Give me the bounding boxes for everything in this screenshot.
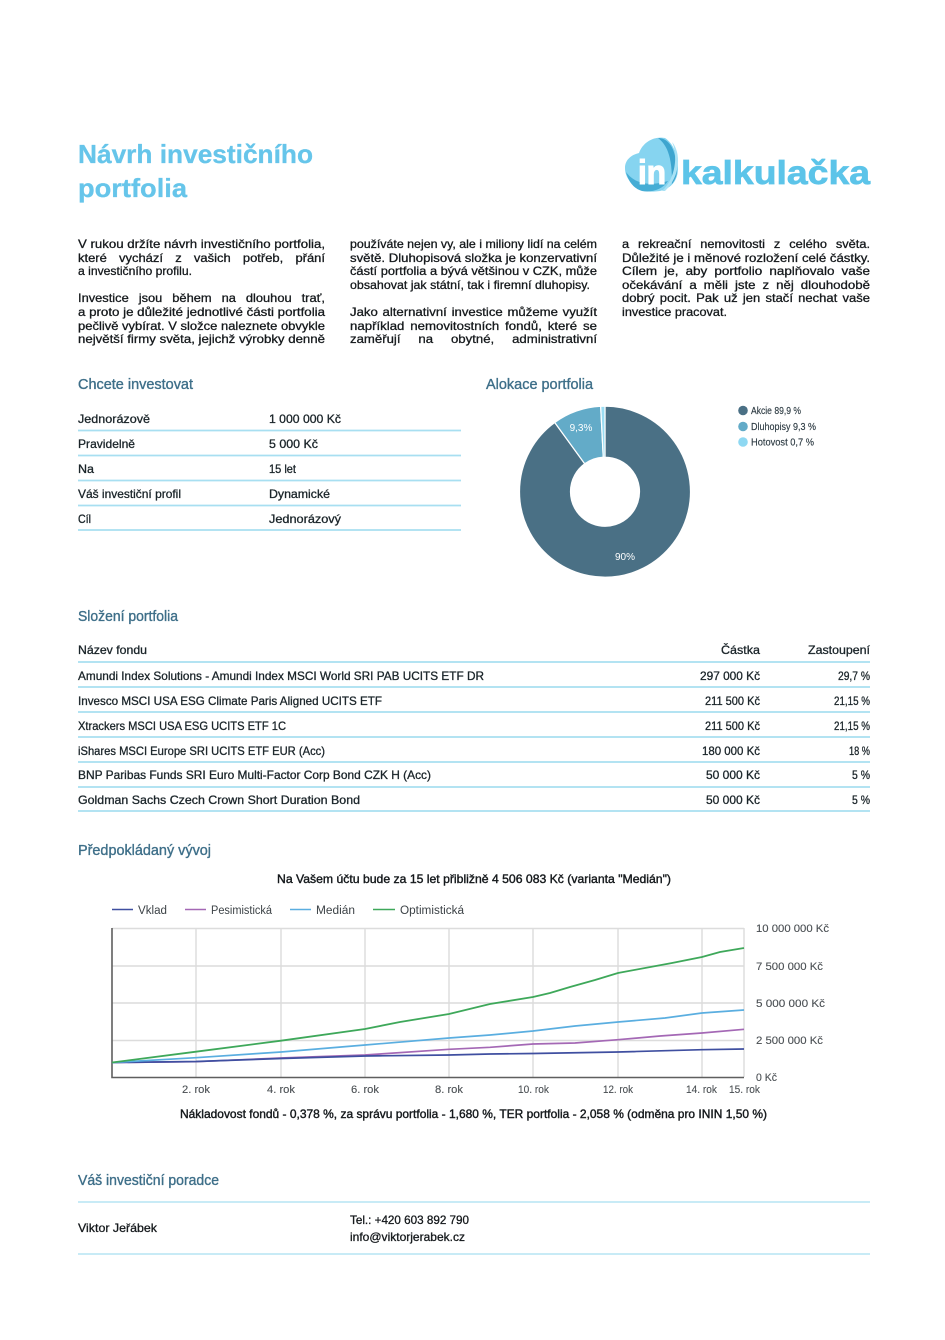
y axis labels: 5 000 000 Kč	[756, 998, 826, 1010]
logo: inkalkulačka: kalkulačka	[681, 154, 871, 191]
text block: column 3: Důležité je i měnové rozložení celé částky.	[622, 251, 870, 265]
table: funds: 21,15 %	[834, 694, 870, 708]
text block: column 1	[78, 237, 326, 346]
table: funds: 50 000 Kč	[706, 793, 760, 807]
table: funds: Invesco MSCI USA ESG Climate Paris Aligned UCITS ETF	[78, 694, 382, 708]
table: investment parameters: Dynamické	[269, 487, 330, 501]
legend: allocation: Dluhopisy 9,3 %	[751, 421, 816, 433]
panel: chcete investovat	[78, 377, 461, 530]
table: funds: 211 500 Kč	[705, 694, 760, 708]
text block: column 2: například nemovitostních fondů, které se	[350, 319, 597, 333]
title: Návrh investičního	[78, 139, 313, 169]
fees note: Nákladovost fondů - 0,378 %, za správu portfolia - 1,680 %, TER portfolia - 2,058 % (odměna pro ININ 1,50 %)	[180, 1107, 767, 1121]
text block: column 2: používáte nejen vy, ale i miliony lidí na celém	[350, 237, 597, 251]
x axis labels: 4. rok	[267, 1084, 296, 1096]
table: funds: 18 %	[849, 744, 870, 758]
donut chart: 90%	[615, 552, 635, 563]
heading: alokace portfolia: Alokace portfolia	[486, 377, 594, 393]
panel: alokace portfolia	[486, 377, 816, 577]
table: investment parameters: Jednorázový	[269, 512, 341, 526]
advisor contact: info@viktorjerabek.cz	[350, 1230, 465, 1244]
x axis labels: 12. rok	[603, 1084, 633, 1096]
text block: column 3: očekávání a měli jste z něj dlouhodobě	[622, 278, 870, 292]
heading: předpokládaný vývoj: Předpokládaný vývoj	[78, 843, 211, 859]
chart legend	[112, 905, 465, 917]
table: funds: 21,15 %	[834, 719, 870, 733]
heading: složení portfolia: Složení portfolia	[78, 609, 179, 625]
table: funds: 50 000 Kč	[706, 768, 760, 782]
table: investment parameters: Na	[78, 462, 94, 476]
advisor contact	[350, 1213, 469, 1244]
text block: column 1: a proto je důležité jednotlivé části portfolia	[78, 305, 325, 319]
x axis labels: 2. rok	[182, 1084, 211, 1096]
table: investment parameters	[78, 412, 461, 530]
advisor contact: Tel.: +420 603 892 790	[350, 1213, 469, 1227]
table: investment parameters: 1 000 000 Kč	[269, 412, 341, 426]
legend: allocation: Akcie 89,9 %	[751, 405, 801, 417]
panel: předpokládaný vývoj	[78, 843, 830, 1121]
y axis labels: 7 500 000 Kč	[756, 961, 824, 973]
y axis labels: 10 000 000 Kč	[756, 923, 830, 935]
heading: chcete investovat: Chcete investovat	[78, 377, 193, 393]
title: portfolia	[78, 173, 188, 203]
text block: column 1: Investice jsou během na dlouhou trať,	[78, 291, 325, 305]
text block: column 1: a investičního profilu.	[78, 264, 192, 278]
x axis labels: 8. rok	[435, 1084, 464, 1096]
table: funds: iShares MSCI Europe SRI UCITS ETF EUR (Acc)	[78, 744, 325, 758]
text block: column 2: Jako alternativní investice můžeme využít	[350, 305, 598, 319]
text block: column 2: obsahovat jak státní, tak i firemní dluhopisy.	[350, 278, 590, 292]
table: funds: Název fondu	[78, 643, 147, 657]
text block: column 1: pečlivě vybírat. V složce naleznete obvykle	[78, 319, 325, 333]
y axis labels: 2 500 000 Kč	[756, 1035, 824, 1047]
table: investment parameters: Cíl	[78, 512, 91, 526]
x axis labels: 10. rok	[518, 1084, 549, 1096]
text block: column 2	[350, 237, 598, 346]
text block: column 2: zaměřují na obytné, administrativní	[350, 332, 598, 346]
x axis labels	[182, 1084, 760, 1096]
panel: složení portfolia	[78, 609, 871, 811]
logo: inkalkulačka: in	[638, 154, 666, 192]
heading: váš investiční poradce: Váš investiční poradce	[78, 1173, 219, 1189]
table: funds: 180 000 Kč	[702, 744, 760, 758]
text block: column 3	[622, 237, 870, 319]
table: funds: Goldman Sachs Czech Crown Short Duration Bond	[78, 793, 360, 807]
y axis labels	[756, 923, 830, 1084]
panel: investiční poradce	[78, 1173, 870, 1254]
table: investment parameters: Váš investiční profil	[78, 487, 181, 501]
chart subtitle: Na Vašem účtu bude za 15 let přibližně 4 506 083 Kč (varianta "Medián")	[277, 872, 671, 886]
text block: column 2: částí portfolia a bývá většinou v CZK, může	[350, 264, 597, 278]
table: funds	[78, 642, 871, 811]
table: funds: 5 %	[852, 793, 870, 807]
table: funds: 5 %	[852, 768, 870, 782]
text block: column 3: a rekreační nemovitosti z celého světa.	[622, 237, 870, 251]
donut chart	[519, 406, 690, 577]
table: investment parameters: Jednorázově	[78, 412, 150, 426]
legend: allocation	[738, 405, 816, 448]
table: investment parameters: 5 000 Kč	[269, 437, 318, 451]
table: funds: Xtrackers MSCI USA ESG UCITS ETF 1C	[78, 719, 286, 733]
chart legend: Pesimistická	[211, 905, 273, 917]
text block: column 1: největší firmy světa, jejichž výrobky denně	[78, 332, 325, 346]
table: investment parameters: 15 let	[269, 462, 297, 476]
table: funds: 297 000 Kč	[700, 669, 760, 683]
text block: column 1: V rukou držíte návrh investičního portfolia,	[78, 237, 325, 251]
table: funds: 29,7 %	[838, 669, 870, 683]
text block: column 2: světě. Dluhopisová složka je konzervativní	[350, 251, 598, 265]
text block: column 3: Cílem je, aby portfolio naplňovalo vaše	[622, 264, 870, 278]
logo: inkalkulačka	[625, 138, 871, 192]
chart legend: Vklad	[138, 905, 167, 917]
table: investment parameters: Pravidelně	[78, 437, 135, 451]
table: funds: Zastoupení	[808, 643, 871, 657]
table: funds: 211 500 Kč	[705, 719, 760, 733]
x axis labels: 14. rok	[686, 1084, 717, 1096]
table: funds: Částka	[721, 642, 760, 657]
advisor name: Viktor Jeřábek	[78, 1221, 158, 1235]
line chart	[112, 928, 744, 1078]
title	[78, 139, 313, 203]
x axis labels: 15. rok	[729, 1084, 760, 1096]
table: funds: Amundi Index Solutions - Amundi Index MSCI World SRI PAB UCITS ETF DR	[78, 669, 484, 683]
text block: column 3: investice pracovat.	[622, 305, 727, 319]
x axis labels: 6. rok	[351, 1084, 380, 1096]
y axis labels: 0 Kč	[756, 1072, 777, 1084]
legend: allocation: Hotovost 0,7 %	[751, 436, 814, 448]
text block: column 3: dobrý pocit. Pak už jen stačí nechat vaše	[622, 291, 870, 305]
chart legend: Optimistická	[400, 905, 465, 917]
chart legend: Medián	[316, 905, 355, 917]
donut chart: 9,3%	[570, 423, 593, 434]
text block: column 1: které vychází z vašich potřeb, přání	[78, 251, 326, 265]
table: funds: BNP Paribas Funds SRI Euro Multi-Factor Corp Bond CZK H (Acc)	[78, 768, 431, 782]
